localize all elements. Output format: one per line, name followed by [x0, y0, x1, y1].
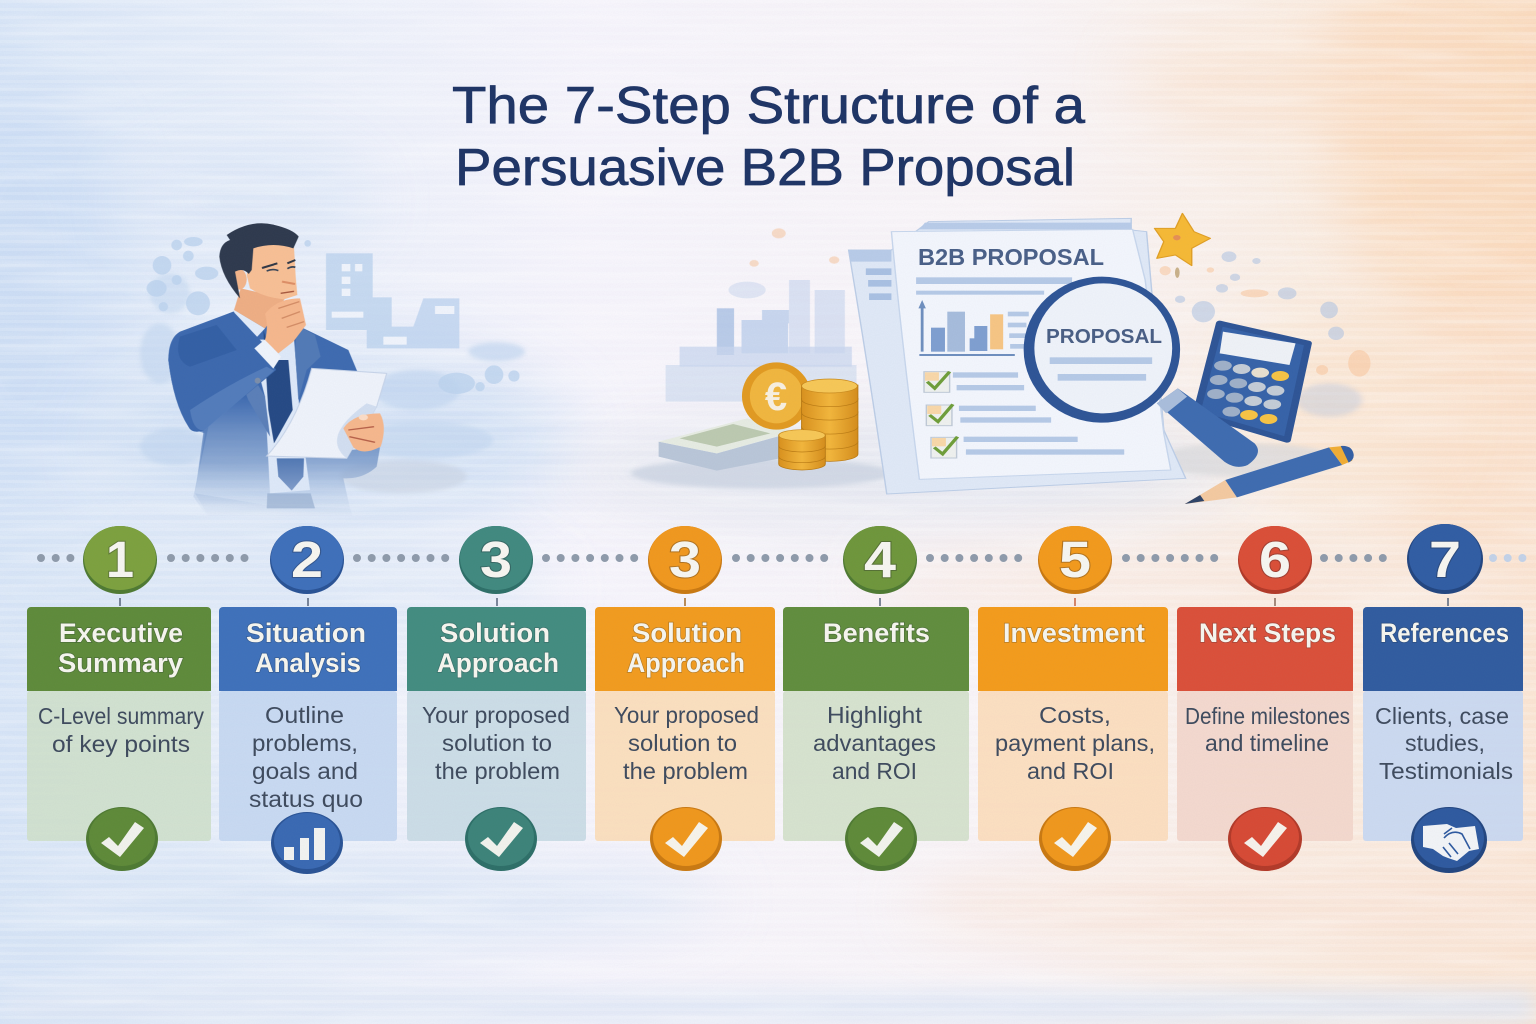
check icon — [465, 807, 537, 871]
belt — [267, 493, 315, 508]
illustration: proposal document with coins, magnifier, calculator and pencil — [631, 213, 1371, 504]
card header: Solution — [632, 618, 742, 648]
title — [452, 77, 1085, 197]
number badge — [843, 526, 917, 594]
card header: Situation — [246, 618, 366, 648]
suit — [168, 312, 358, 530]
number badge: 3 — [669, 531, 701, 588]
number badge: 2 — [291, 531, 323, 588]
number badge — [1038, 526, 1112, 594]
description — [422, 702, 570, 784]
handshake icon — [1411, 807, 1487, 873]
card body — [595, 691, 775, 841]
neck — [234, 288, 285, 328]
bar chart icon — [271, 812, 343, 874]
card header: Approach — [437, 648, 559, 678]
card header: Investment — [1003, 618, 1145, 648]
checklist on document — [924, 372, 958, 458]
number badge — [1238, 526, 1312, 594]
card header — [978, 607, 1168, 691]
lapels — [215, 312, 270, 437]
description: solution to — [628, 730, 737, 756]
card body — [783, 691, 969, 841]
building windows — [332, 264, 454, 345]
card header: Approach — [627, 648, 745, 678]
card header: Next Steps — [1199, 618, 1336, 648]
card header — [783, 607, 969, 691]
tie — [263, 330, 293, 443]
step 2: Situation Analysis — [219, 526, 397, 874]
euro coin — [742, 362, 811, 430]
description: Costs, — [1039, 702, 1111, 728]
card header: Executive — [59, 618, 183, 648]
description — [1185, 703, 1350, 756]
card header: Solution — [440, 618, 550, 648]
number badge: 1 — [106, 531, 134, 588]
card body — [978, 691, 1168, 841]
card body — [219, 691, 397, 841]
bar chart on document — [918, 300, 1015, 355]
scattered paint spots — [1160, 251, 1371, 377]
card body — [1363, 691, 1523, 841]
timeline dotted connectors — [41, 554, 1524, 562]
description: Your proposed — [614, 702, 759, 728]
faded city skyline behind businessman — [147, 237, 520, 394]
hand at chin — [265, 298, 306, 353]
card body — [27, 691, 211, 841]
card header — [27, 607, 211, 691]
number badge — [459, 526, 533, 594]
description: status quo — [249, 786, 363, 812]
description — [813, 702, 936, 784]
description — [38, 703, 204, 757]
check icon — [845, 807, 917, 871]
step 6: Next Steps — [1177, 526, 1353, 871]
cash bundle — [659, 418, 794, 471]
sheet of paper — [267, 368, 387, 458]
description: goals and — [252, 758, 358, 784]
gold coin stacks — [779, 379, 858, 470]
description — [614, 702, 759, 784]
shirt — [250, 338, 310, 493]
card header: Benefits — [823, 618, 930, 648]
magnifying glass — [1024, 277, 1258, 467]
card header — [407, 607, 586, 691]
number badge: 5 — [1059, 531, 1091, 588]
description: studies, — [1405, 730, 1485, 756]
step 1: Executive Summary — [27, 526, 211, 871]
title: The 7-Step Structure of a — [452, 77, 1085, 135]
card header: Summary — [58, 648, 183, 678]
description: Your proposed — [422, 702, 570, 728]
card header: References — [1380, 618, 1509, 648]
table shadow — [631, 383, 1362, 488]
title: Persuasive B2B Proposal — [455, 139, 1075, 197]
number badge: 6 — [1259, 531, 1291, 588]
description — [995, 702, 1155, 784]
step 7: References — [1363, 524, 1523, 873]
description: Outline — [265, 702, 344, 728]
card header: Analysis — [255, 648, 361, 678]
check icon — [86, 807, 158, 871]
star — [1154, 213, 1210, 278]
check icon — [1039, 807, 1111, 871]
hair — [219, 223, 299, 298]
description: solution to — [442, 730, 552, 756]
description: Highlight — [827, 702, 923, 728]
euro symbol: € — [765, 375, 787, 419]
description: Define milestones — [1185, 703, 1350, 729]
description — [249, 702, 363, 812]
number badge — [1407, 524, 1483, 594]
pencil — [1185, 446, 1354, 504]
check icon — [1228, 807, 1302, 871]
description: and ROI — [832, 758, 917, 784]
step 3: Solution Approach — [407, 526, 586, 871]
description: problems, — [252, 730, 358, 756]
lens label: PROPOSAL — [1046, 325, 1162, 348]
number badge: 4 — [864, 531, 897, 588]
card body — [407, 691, 586, 841]
description: the problem — [435, 758, 560, 784]
description: of key points — [52, 731, 190, 757]
card body — [1177, 691, 1353, 841]
illustration: businessman reading a document — [140, 223, 525, 530]
description: Testimonials — [1379, 758, 1513, 784]
card header — [219, 607, 397, 691]
number badge — [270, 526, 344, 594]
description: C-Level summary — [38, 703, 204, 729]
description: Clients, case — [1375, 703, 1509, 729]
description: advantages — [813, 730, 936, 756]
step 4: Benefits — [783, 526, 969, 871]
card header — [1363, 607, 1523, 691]
step 5: Investment — [978, 526, 1168, 871]
faded skyline — [666, 228, 857, 402]
card header — [1177, 607, 1353, 691]
description: payment plans, — [995, 730, 1155, 756]
shirt cuff — [254, 339, 281, 369]
description: and ROI — [1027, 758, 1114, 784]
number badge: 3 — [480, 531, 512, 588]
description: and timeline — [1205, 730, 1329, 756]
description — [1375, 703, 1513, 784]
check icon — [650, 807, 722, 871]
number badge — [648, 526, 722, 594]
hand holding paper — [343, 413, 384, 452]
document pages — [849, 218, 1186, 494]
calculator — [1196, 323, 1308, 440]
description: the problem — [623, 758, 748, 784]
soft wash behind businessman — [140, 273, 525, 493]
face — [247, 244, 297, 299]
number badge: 7 — [1429, 531, 1461, 588]
card header — [595, 607, 775, 691]
forearm raised to chin — [168, 312, 276, 432]
number badge — [83, 526, 157, 594]
document title: B2B PROPOSAL — [918, 244, 1104, 270]
step 3 repeat: Solution Approach — [595, 526, 775, 871]
